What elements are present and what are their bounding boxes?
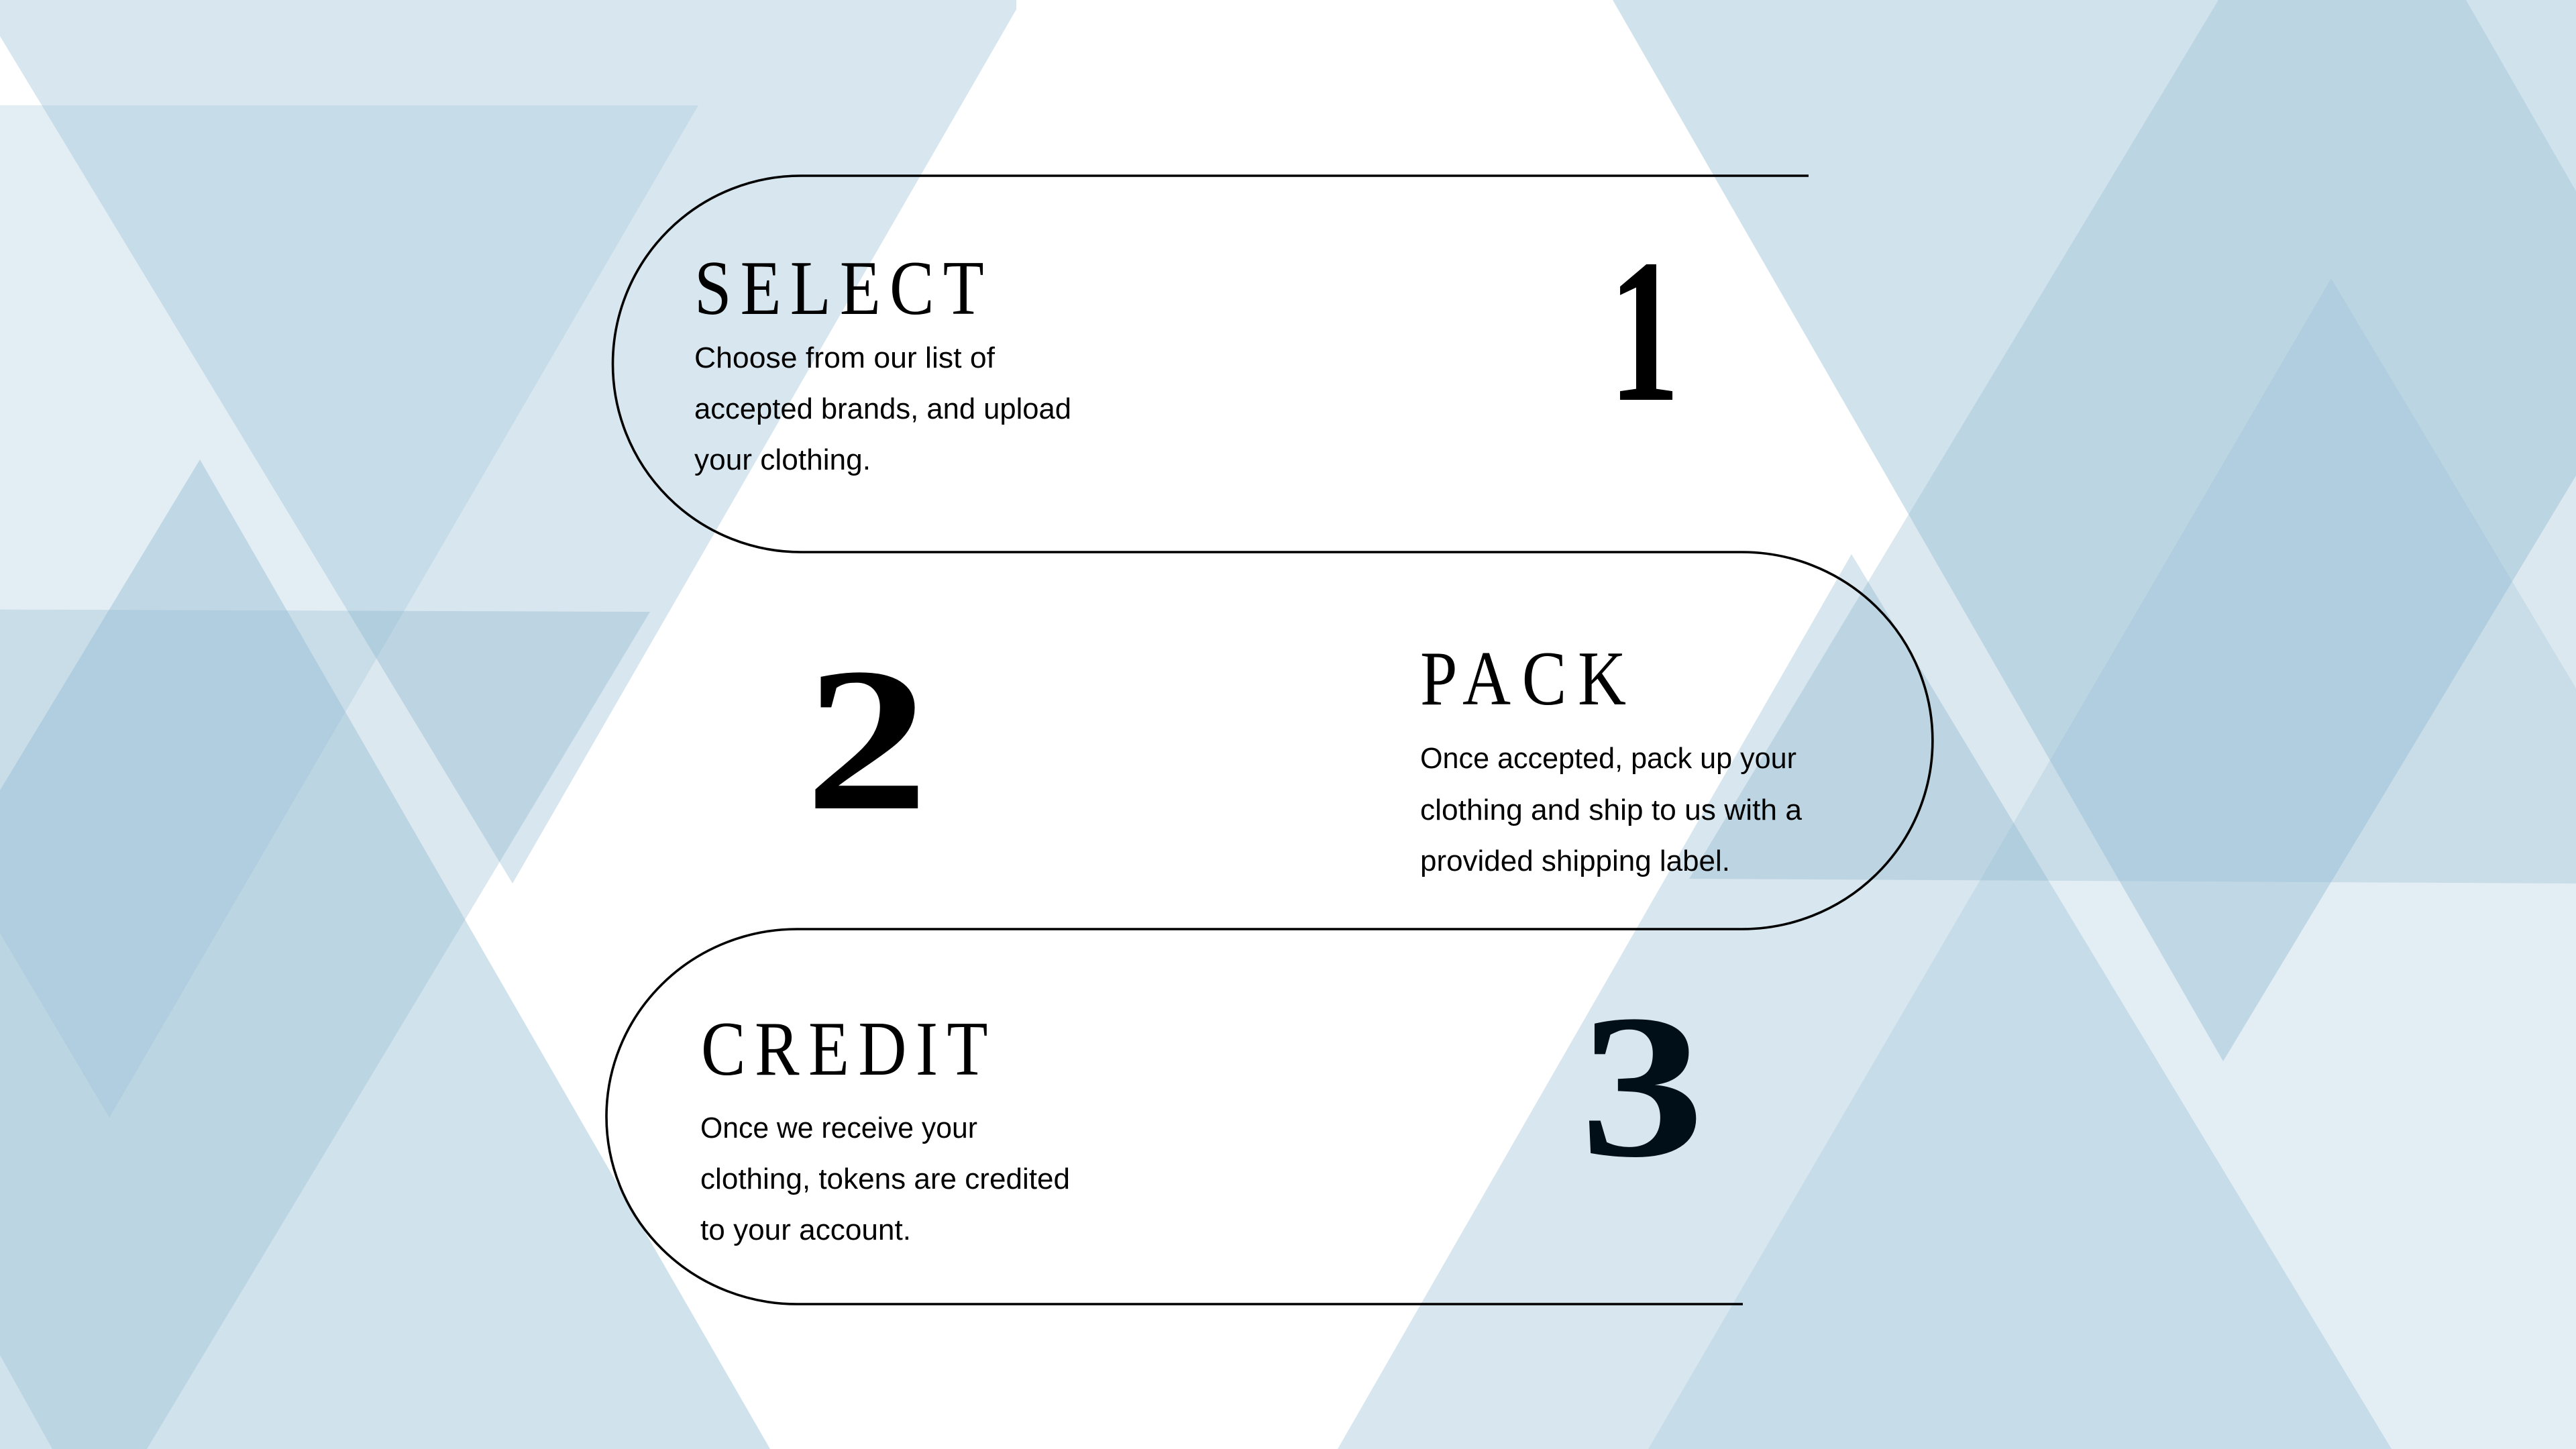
- heading: credit: CREDIT: [701, 1006, 987, 1092]
- number 3: 3: [1580, 973, 1705, 1200]
- text block: pack description: [1420, 742, 1803, 877]
- panel: step 1 select: [694, 217, 1680, 476]
- text block: select description: accepted brands, and upload: [694, 392, 1071, 425]
- panel: step 2 pack: [805, 626, 1803, 877]
- text block: credit description: clothing, tokens are credited: [700, 1163, 1070, 1195]
- text block: pack description: provided shipping label.: [1420, 845, 1730, 877]
- number 1: 1: [1609, 217, 1680, 445]
- text block: pack description: Once accepted, pack up your: [1420, 742, 1796, 775]
- text block: credit description: to your account.: [700, 1214, 911, 1246]
- text block: pack description: clothing and ship to us with a: [1420, 794, 1803, 826]
- text block: select description: Choose from our list of: [694, 341, 996, 374]
- text block: credit description: Once we receive your: [700, 1112, 977, 1144]
- number 2: 2: [805, 626, 928, 853]
- text block: select description: your clothing.: [694, 443, 871, 476]
- text block: credit description: [700, 1112, 1070, 1246]
- heading: pack: PACK: [1420, 636, 1626, 722]
- panel: step 3 credit: [700, 973, 1705, 1246]
- serpentine outline connecting the three steps: [606, 176, 1933, 1304]
- heading: select: SELECT: [694, 246, 984, 331]
- text block: select description: [694, 341, 1071, 476]
